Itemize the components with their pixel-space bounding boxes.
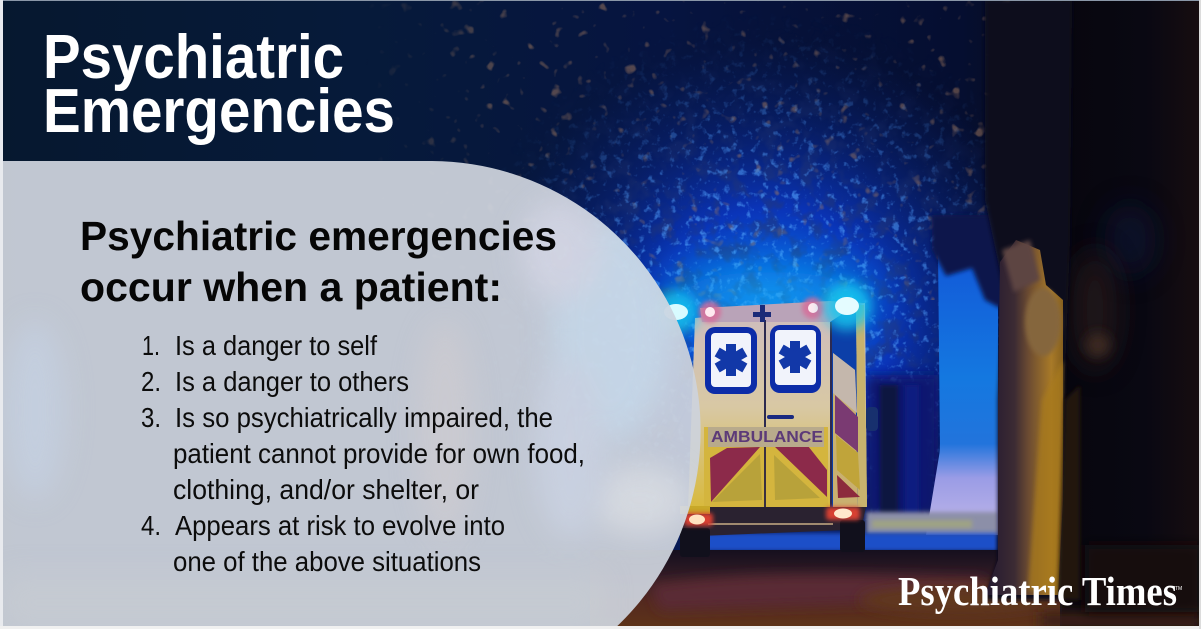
numbered list: 4. (141, 510, 161, 541)
numbered list: Is a danger to others (175, 366, 409, 397)
numbered list: patient cannot provide for own food, (173, 438, 585, 469)
numbered list: 3. (141, 402, 161, 433)
roof band (700, 301, 864, 322)
beacon lights (654, 282, 871, 334)
ambulance lettering: AMBULANCE (711, 429, 823, 446)
numbered list: one of the above situations (173, 546, 481, 577)
icon: star of life left (715, 344, 747, 376)
wing mirror (866, 407, 878, 431)
numbered list: Is a danger to self (175, 330, 377, 361)
glow behind light bar (660, 271, 880, 319)
foliage blotch near trunk (1086, 333, 1110, 357)
main tree trunk (985, 0, 1080, 600)
distant dark trunks behind ambulance (866, 375, 938, 515)
side panel (830, 305, 858, 507)
grass verge (866, 512, 998, 535)
bumper and undercarriage (680, 507, 866, 536)
numbered list: clothing, and/or shelter, or (173, 474, 479, 505)
left wheel (680, 528, 710, 557)
numbered list: Appears at risk to evolve into (175, 510, 505, 541)
right dark trees (1062, 0, 1201, 629)
left rear window (705, 327, 757, 394)
left tail light (684, 513, 713, 526)
logo: Psychiatric Times: Psychiatric Times (898, 568, 1177, 614)
cross on roof (753, 305, 771, 322)
right wheel (840, 520, 865, 552)
numbered list: 1. (142, 330, 160, 361)
foliage over wall (932, 215, 1004, 310)
panel heading (80, 213, 557, 310)
panel heading: Psychiatric emergencies (80, 213, 557, 259)
numbered list (141, 330, 585, 577)
logo: Psychiatric Times: TM (1175, 586, 1182, 592)
panel: translucent rounded text panel (3, 161, 701, 629)
title: Emergencies (43, 77, 395, 146)
door seam (764, 320, 766, 507)
body (688, 303, 867, 510)
panel heading: occur when a patient: (80, 264, 502, 310)
ground path (590, 550, 1060, 629)
numbered list: 2. (141, 366, 161, 397)
door handle (767, 415, 794, 419)
icon: star of life right (779, 341, 811, 373)
title: Psychiatric (43, 23, 344, 92)
title (43, 23, 395, 146)
numbered list: Is so psychiatrically impaired, the (175, 402, 553, 433)
chevrons on doors (704, 427, 828, 507)
right rear window (770, 325, 821, 393)
blue road band (690, 533, 998, 551)
ambulance (654, 271, 880, 557)
bright blue lit wall/trunk (926, 250, 998, 535)
right tail light (826, 507, 860, 520)
